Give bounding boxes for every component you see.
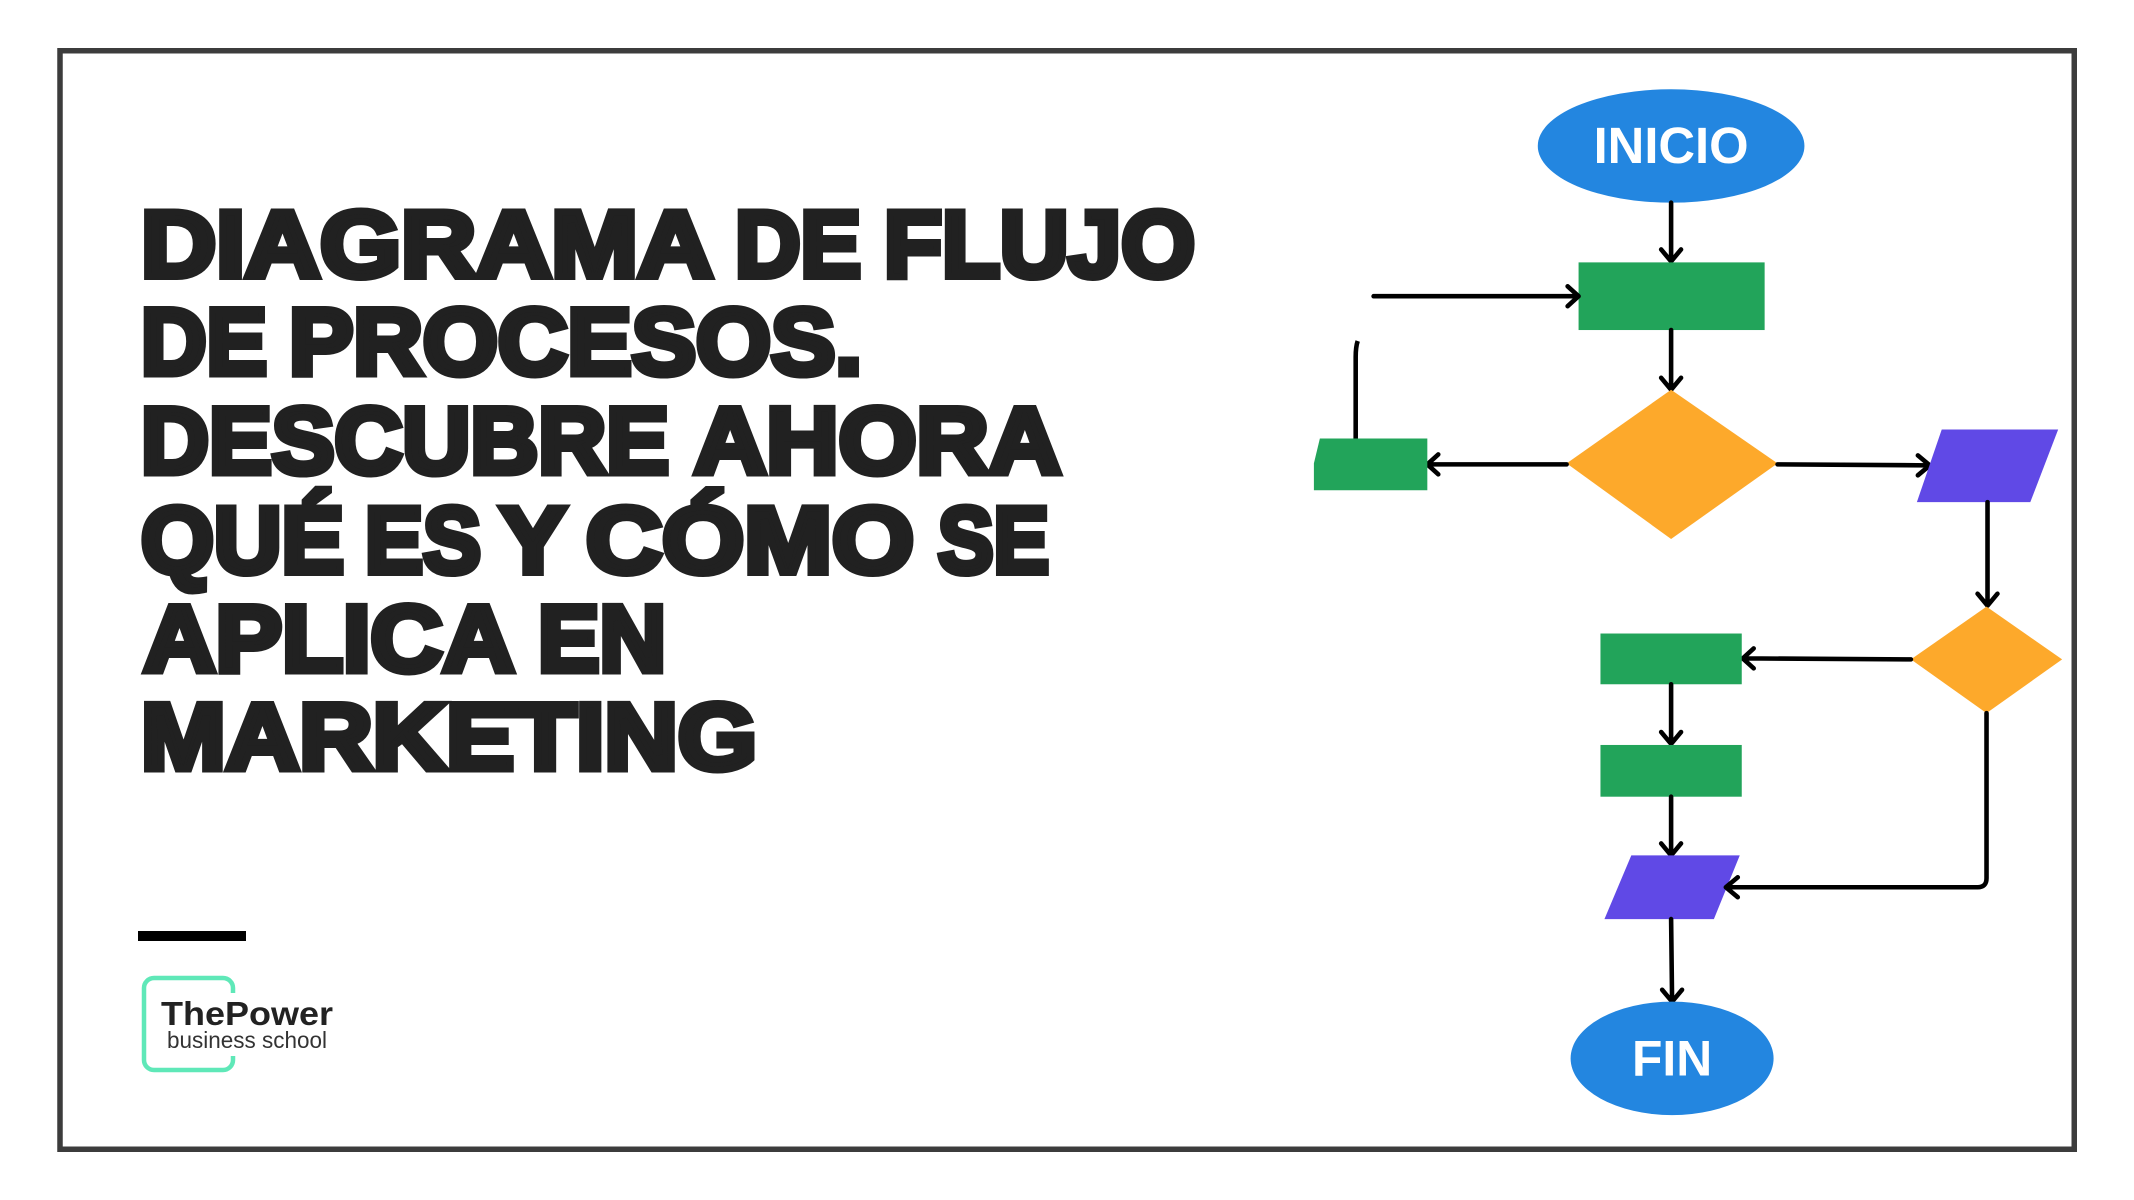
arrow: output 2 to fin [1662, 919, 1682, 1002]
icon: logo bracket [144, 978, 233, 1070]
end node: FIN [1571, 1002, 1774, 1115]
logo: ThePower business school [144, 978, 333, 1070]
accent bar [138, 931, 246, 941]
title [141, 192, 1195, 789]
arrow: process 3 to output 2 [1661, 797, 1681, 855]
title: DIAGRAMA [141, 192, 713, 296]
title: QUÉ [141, 488, 344, 592]
output parallelogram 2 [1604, 855, 1740, 919]
left process box [1314, 438, 1427, 490]
title: APLICA [144, 586, 514, 691]
title: DE [735, 192, 861, 296]
arrow: decision to output [1778, 455, 1930, 475]
process box 1 [1579, 262, 1765, 330]
arrow: decision 2 to process 2 [1743, 648, 1911, 668]
title: CÓMO [586, 488, 914, 592]
arrow: output to decision 2 [1978, 502, 1997, 606]
title: PROCESOS. [289, 289, 862, 394]
title: Y [500, 488, 566, 592]
start node: INICIO [1538, 89, 1804, 203]
arrow: feedback into process [1374, 286, 1579, 306]
end node: FIN: FIN [1632, 1030, 1712, 1086]
output parallelogram 1 [1917, 430, 2058, 502]
decision diamond 2 [1911, 607, 2062, 713]
title: DE [141, 289, 267, 394]
title: EN [538, 586, 666, 691]
title: ES [365, 488, 481, 592]
arrow: decision 2 to output 2 [1726, 713, 1987, 897]
flowchart [1314, 89, 2062, 1115]
start node: INICIO: INICIO [1594, 117, 1749, 174]
logo tagline: business school [167, 1027, 327, 1053]
arrow: process to decision [1661, 330, 1681, 390]
arrow: inicio to process [1661, 203, 1681, 261]
process box 3 [1600, 745, 1742, 797]
process box 2 [1600, 634, 1742, 684]
title: SE [938, 488, 1049, 592]
arrow: process 2 to process 3 [1661, 684, 1681, 744]
title: DESCUBRE [141, 388, 669, 493]
decision diamond 1 [1567, 390, 1778, 539]
title: AHORA [694, 388, 1061, 493]
logo name: ThePower [161, 995, 333, 1032]
title: FLUJO [884, 192, 1195, 296]
arrow: decision to left box [1427, 454, 1567, 474]
title: MARKETING [141, 684, 757, 789]
line: left box upward [1356, 341, 1358, 438]
